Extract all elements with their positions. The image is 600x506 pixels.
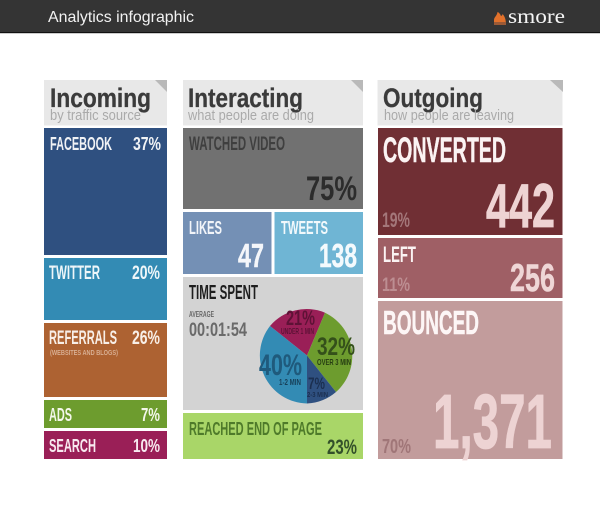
panel: incoming xyxy=(44,80,167,459)
tile: facebook xyxy=(44,128,167,255)
tile: ads: ADS xyxy=(49,405,72,425)
tile: facebook: 37% xyxy=(133,134,161,154)
tile: left: 11% xyxy=(382,275,410,296)
heading: interacting: what people are doing xyxy=(187,107,314,124)
tile: watched video xyxy=(183,128,363,209)
tile: watched video: WATCHED VIDEO xyxy=(189,134,285,155)
tile: twitter: 20% xyxy=(132,263,160,284)
tile: converted: 19% xyxy=(382,209,410,232)
average time xyxy=(189,310,247,341)
tile: search xyxy=(44,431,167,459)
top bar xyxy=(0,0,600,34)
tile: converted xyxy=(378,128,562,241)
pie chart: UNDER 1 MIN xyxy=(281,326,314,336)
heading: outgoing: Outgoing xyxy=(383,83,483,113)
tile: watched video: 75% xyxy=(306,170,357,208)
tile: referrals: (WEBSITES AND BLOGS) xyxy=(50,350,118,357)
tile: referrals xyxy=(44,323,167,397)
smore logo: smore xyxy=(508,4,565,28)
tile: converted: 442 xyxy=(486,172,555,241)
tile: time spent: TIME SPENT xyxy=(189,282,258,304)
panel: interacting xyxy=(183,80,363,459)
tile: twitter: TWITTER xyxy=(49,263,100,284)
tile: left: 256 xyxy=(510,257,555,300)
tile: tweets: TWEETS xyxy=(281,218,328,238)
tile: tweets: 138 xyxy=(319,237,357,274)
tile: converted: CONVERTED xyxy=(383,131,506,170)
tile: tweets xyxy=(274,212,363,274)
pie chart xyxy=(259,307,355,404)
tile: twitter xyxy=(44,258,167,320)
heading: incoming: Incoming xyxy=(50,83,151,113)
tile: search: 10% xyxy=(133,436,160,456)
panel: outgoing xyxy=(378,80,563,465)
tile: referrals: 26% xyxy=(132,328,160,349)
heading: interacting: Interacting xyxy=(188,83,303,113)
tile: likes: 47 xyxy=(238,237,264,274)
heading: incoming xyxy=(44,80,167,126)
tile: time spent xyxy=(183,277,363,410)
average time: AVERAGE xyxy=(189,310,214,319)
pie chart: 40% xyxy=(259,349,302,382)
pie chart: 7% xyxy=(308,374,325,393)
tile: ads xyxy=(44,400,167,428)
pie chart: OVER 3 MIN xyxy=(317,357,351,367)
heading: interacting xyxy=(183,80,363,126)
tile: reached end of page xyxy=(183,413,363,459)
heading: incoming: by traffic source xyxy=(50,107,141,124)
tile: search: SEARCH xyxy=(49,436,96,456)
average time: 00:01:54 xyxy=(189,320,247,341)
tile: left: LEFT xyxy=(383,242,416,267)
tile: reached end of page: 23% xyxy=(327,436,357,459)
tile: reached end of page: REACHED END OF PAGE xyxy=(189,419,322,439)
pie chart: 2-3 MIN xyxy=(307,390,328,399)
heading: outgoing xyxy=(378,80,563,126)
tile: left xyxy=(378,238,562,300)
pie chart: 32% xyxy=(317,333,355,361)
tile: bounced: 70% xyxy=(382,436,411,458)
pie chart: 1-2 MIN xyxy=(279,377,301,387)
tile: facebook: FACEBOOK xyxy=(50,134,112,154)
bar title: Analytics infographic xyxy=(48,9,194,26)
heading: outgoing: how people are leaving xyxy=(384,107,514,124)
tile: likes: LIKES xyxy=(189,218,222,238)
tile: ads: 7% xyxy=(141,405,160,425)
tile: referrals: REFERRALS xyxy=(49,328,117,349)
tile: likes xyxy=(183,212,272,274)
tile: bounced: BOUNCED xyxy=(383,304,479,341)
tile: bounced xyxy=(378,301,562,465)
pie chart: 21% xyxy=(286,307,315,330)
